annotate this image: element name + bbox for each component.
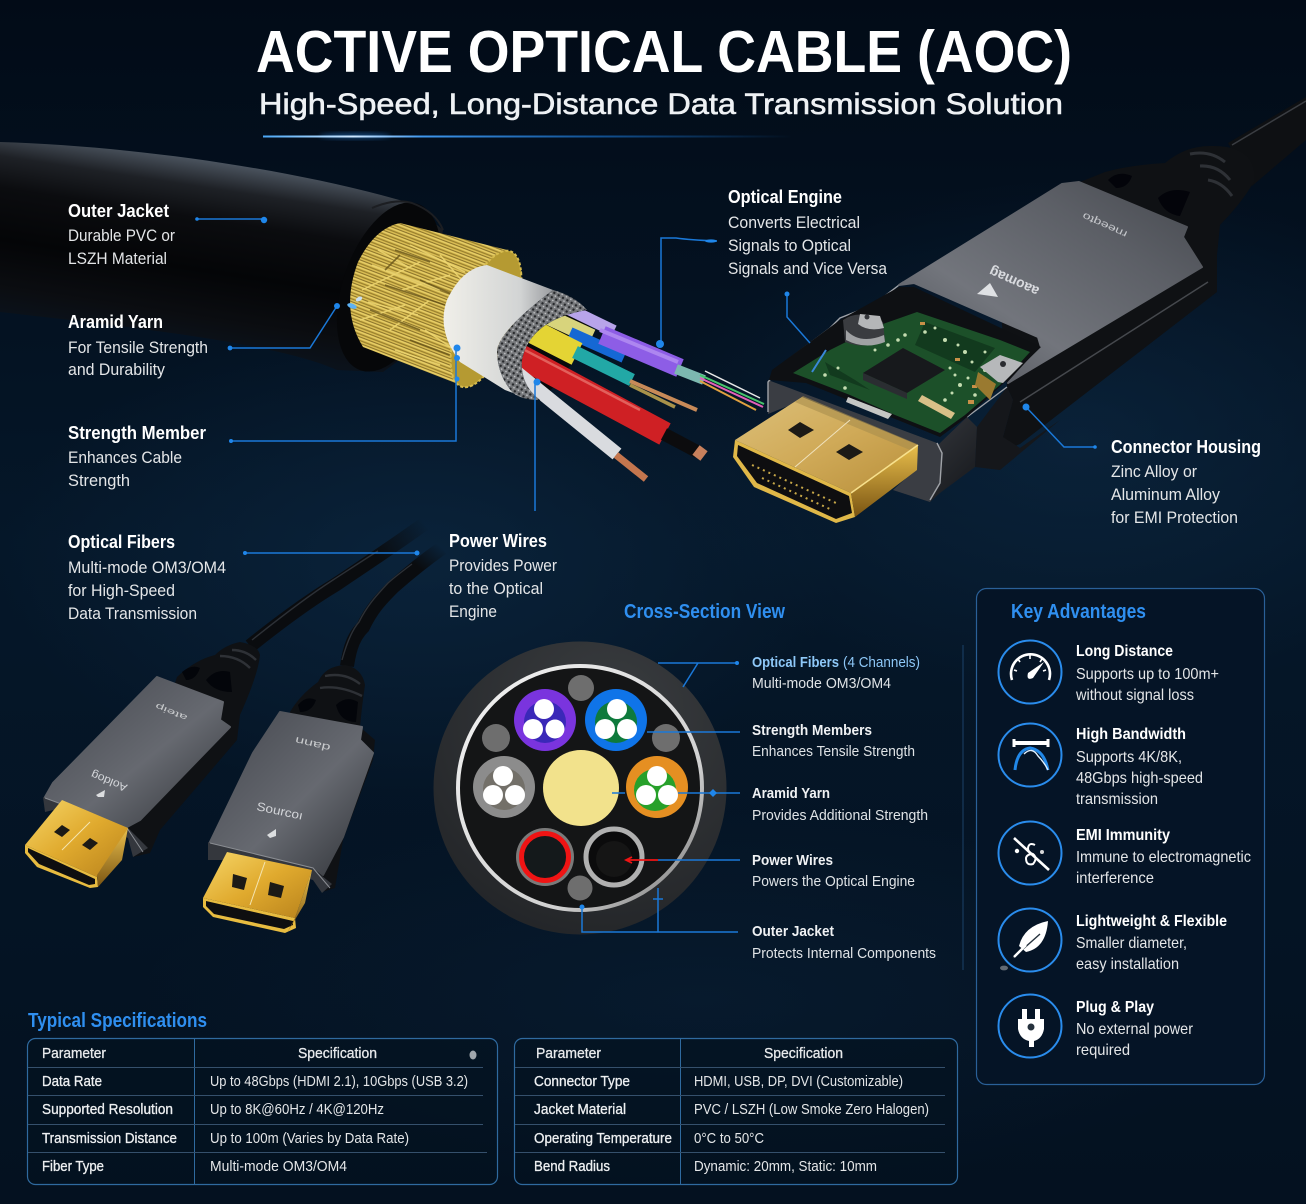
callout: strength member: Enhances Cable bbox=[68, 448, 182, 467]
advantage: high bandwidth: High Bandwidth bbox=[1076, 726, 1186, 743]
callout: strength member: Strength Member bbox=[68, 423, 206, 443]
advantage: emi immunity: Immune to electromagnetic bbox=[1076, 849, 1251, 866]
outer jacket bbox=[434, 642, 726, 934]
fiber tube: purple bbox=[514, 689, 576, 751]
callout: optical engine bbox=[656, 187, 887, 348]
callout: aramid yarn bbox=[612, 785, 928, 824]
advantage: high bandwidth: transmission bbox=[1076, 791, 1158, 808]
callout: strength members bbox=[647, 722, 915, 760]
fiber tube: blue bbox=[585, 689, 647, 751]
callout: outer jacket: LSZH Material bbox=[68, 249, 167, 268]
table: specifications right: PVC / LSZH (Low Smoke Zero Halogen) bbox=[694, 1102, 929, 1118]
table: specifications left: Fiber Type bbox=[42, 1159, 104, 1175]
callout: aramid yarn: Provides Additional Strength bbox=[752, 807, 928, 824]
advantage: emi immunity bbox=[998, 822, 1251, 887]
callout: strength members: Enhances Tensile Strength bbox=[752, 743, 915, 760]
front sleeve bbox=[768, 282, 1060, 502]
illustration: stripped main cable bbox=[0, 142, 764, 479]
strain relief and lower body bbox=[1000, 146, 1254, 450]
left connector: ateip bbox=[153, 701, 189, 722]
callout: optical engine: Converts Electrical bbox=[728, 213, 860, 232]
advantage: long distance: Long Distance bbox=[1076, 643, 1173, 660]
advantage: emi immunity: EMI Immunity bbox=[1076, 827, 1170, 844]
callout: connector housing: Zinc Alloy or bbox=[1111, 462, 1197, 481]
table: specifications left bbox=[28, 1038, 498, 1184]
callout: power wires: Provides Power bbox=[449, 556, 557, 575]
table: specifications right: 0°C to 50°C bbox=[694, 1131, 764, 1147]
illustration: pair of connectors bbox=[25, 524, 442, 933]
table: specifications left: Supported Resolution bbox=[42, 1102, 173, 1118]
advantage: plug and play: Plug & Play bbox=[1076, 999, 1154, 1016]
callout: optical fibers channels bbox=[658, 654, 920, 692]
top plate bbox=[899, 182, 1202, 383]
callout: optical engine: Signals to Optical bbox=[728, 236, 851, 255]
callout: aramid yarn: Aramid Yarn bbox=[752, 785, 830, 802]
optical fiber bundles bbox=[522, 310, 764, 482]
power wire: white bbox=[586, 829, 642, 885]
right connector: Sourcoı bbox=[255, 799, 304, 823]
left connector bbox=[25, 524, 424, 888]
callout: aramid yarn: and Durability bbox=[68, 360, 165, 379]
heading: typical specifications: Typical Specifications bbox=[28, 1010, 207, 1032]
white wrap bbox=[444, 265, 553, 393]
advantage: high bandwidth bbox=[998, 724, 1203, 808]
callout: aramid yarn bbox=[68, 303, 340, 379]
heading: cross-section view: Cross-Section View bbox=[624, 601, 785, 623]
callout: outer jacket: Outer Jacket bbox=[752, 923, 834, 940]
callout: strength member bbox=[68, 344, 460, 490]
callout: outer jacket: Outer Jacket bbox=[68, 201, 169, 221]
silver band bbox=[497, 290, 587, 400]
right connector: dann bbox=[294, 734, 332, 753]
callout: optical fibers: for High-Speed bbox=[68, 581, 175, 600]
fiber tube: orange bbox=[626, 756, 688, 818]
cable bbox=[1228, 97, 1306, 186]
cross-section diagram bbox=[434, 642, 726, 934]
shield ring bbox=[458, 666, 702, 910]
callout: power wires: Engine bbox=[449, 602, 497, 621]
table: specifications right bbox=[514, 1038, 958, 1184]
callout: strength member: Strength bbox=[68, 471, 130, 490]
power wire: red bbox=[516, 828, 574, 886]
cross-section callouts bbox=[580, 654, 936, 962]
panel: key advantages bbox=[976, 588, 1264, 1084]
table: specifications left: Up to 8K@60Hz / 4K@120Hz bbox=[210, 1102, 384, 1118]
callout: connector housing bbox=[1022, 404, 1261, 527]
callout: outer jacket: Durable PVC or bbox=[68, 226, 175, 245]
gold plug bbox=[733, 396, 918, 523]
callout: optical fibers channels: (4 Channels) bbox=[843, 654, 920, 671]
callout: power wires: Power Wires bbox=[752, 852, 833, 869]
fiber tube: grey bbox=[473, 756, 535, 818]
table: specifications right: Jacket Material bbox=[534, 1102, 626, 1118]
table: specifications right: Connector Type bbox=[534, 1074, 630, 1090]
advantage: long distance bbox=[998, 640, 1219, 704]
aramid yarn bbox=[346, 223, 536, 396]
callout: connector housing: Connector Housing bbox=[1111, 437, 1261, 457]
advantage: high bandwidth: 48Gbps high-speed bbox=[1076, 770, 1203, 787]
aramid core bbox=[543, 750, 619, 826]
table: specifications right: HDMI, USB, DP, DVI (Customizable) bbox=[694, 1074, 903, 1090]
callout: outer jacket bbox=[580, 888, 936, 962]
callout: power wires bbox=[449, 378, 557, 621]
table: specifications left: Data Rate bbox=[42, 1074, 102, 1090]
table: specifications left: Up to 48Gbps (HDMI 2.1), 10Gbps (USB 3.2) bbox=[210, 1074, 468, 1090]
table: specifications right: Bend Radius bbox=[534, 1159, 610, 1175]
plate marking: aaomag bbox=[986, 264, 1041, 300]
advantage: plug and play bbox=[998, 994, 1194, 1059]
callout: aramid yarn: For Tensile Strength bbox=[68, 338, 208, 357]
callout: optical fibers bbox=[68, 532, 420, 623]
table: specifications right: Parameter bbox=[536, 1046, 601, 1062]
illustration: large connector with open optical engine: rneeqto bbox=[1080, 209, 1129, 239]
advantage: high bandwidth: Supports 4K/8K, bbox=[1076, 749, 1182, 766]
advantage: lightweight and flexible: Lightweight & Flexible bbox=[1076, 913, 1227, 930]
advantage: lightweight and flexible bbox=[998, 908, 1227, 973]
red pointer bbox=[626, 857, 658, 863]
strength members bbox=[482, 675, 680, 900]
callout: power wires: Powers the Optical Engine bbox=[752, 873, 915, 890]
optical engine circuit board bbox=[769, 287, 1041, 437]
callout: outer jacket bbox=[68, 201, 267, 268]
table: specifications left: Multi-mode OM3/OM4 bbox=[210, 1159, 347, 1175]
table: specifications right: Specification bbox=[764, 1046, 843, 1062]
left connector: Aoldog bbox=[89, 768, 129, 793]
callout: optical engine: Signals and Vice Versa bbox=[728, 259, 887, 278]
callout: optical engine: Optical Engine bbox=[728, 187, 842, 207]
heading: key advantages: Key Advantages bbox=[1011, 601, 1146, 623]
advantage: long distance: without signal loss bbox=[1075, 687, 1194, 704]
advantage: lightweight and flexible: Smaller diameter, bbox=[1076, 935, 1187, 952]
callout: power wires: to the Optical bbox=[449, 579, 543, 598]
callout: aramid yarn: Aramid Yarn bbox=[68, 312, 163, 332]
callout: outer jacket: Protects Internal Components bbox=[752, 945, 936, 962]
jacket bbox=[0, 142, 443, 372]
table: specifications left: Specification bbox=[298, 1046, 377, 1062]
advantage: plug and play: required bbox=[1076, 1042, 1130, 1059]
table: specifications left: Parameter bbox=[42, 1046, 106, 1062]
callout: strength members: Strength Members bbox=[752, 722, 872, 739]
subtitle: High-Speed, Long-Distance Data Transmission Solution bbox=[259, 88, 1063, 121]
callout: power wires: Power Wires bbox=[449, 531, 547, 551]
callout: optical fibers channels: Optical Fibers bbox=[752, 654, 839, 671]
callout: connector housing: for EMI Protection bbox=[1111, 508, 1238, 527]
callout: optical fibers: Optical Fibers bbox=[68, 532, 175, 552]
table: specifications right: Operating Temperature bbox=[534, 1131, 672, 1147]
table: specifications left: Up to 100m (Varies by Data Rate) bbox=[210, 1131, 409, 1147]
callout: optical fibers: Multi-mode OM3/OM4 bbox=[68, 558, 226, 577]
right connector bbox=[203, 548, 442, 933]
callout: optical fibers: Data Transmission bbox=[68, 604, 197, 623]
advantage: lightweight and flexible: easy installation bbox=[1076, 956, 1179, 973]
table: specifications right: Dynamic: 20mm, Static: 10mm bbox=[694, 1159, 877, 1175]
title: ACTIVE OPTICAL CABLE (AOC) bbox=[256, 19, 1072, 85]
advantage: emi immunity: interference bbox=[1076, 870, 1154, 887]
cable interior bbox=[522, 310, 590, 400]
illustration: large connector with open optical engine bbox=[733, 97, 1306, 523]
advantage: plug and play: No external power bbox=[1076, 1021, 1194, 1038]
table: specifications left: Transmission Distance bbox=[42, 1131, 177, 1147]
callout: power wires bbox=[658, 852, 915, 890]
callout: connector housing: Aluminum Alloy bbox=[1111, 485, 1220, 504]
advantage: long distance: Supports up to 100m+ bbox=[1076, 666, 1219, 683]
callout: optical fibers channels: Multi-mode OM3/OM4 bbox=[752, 675, 891, 692]
